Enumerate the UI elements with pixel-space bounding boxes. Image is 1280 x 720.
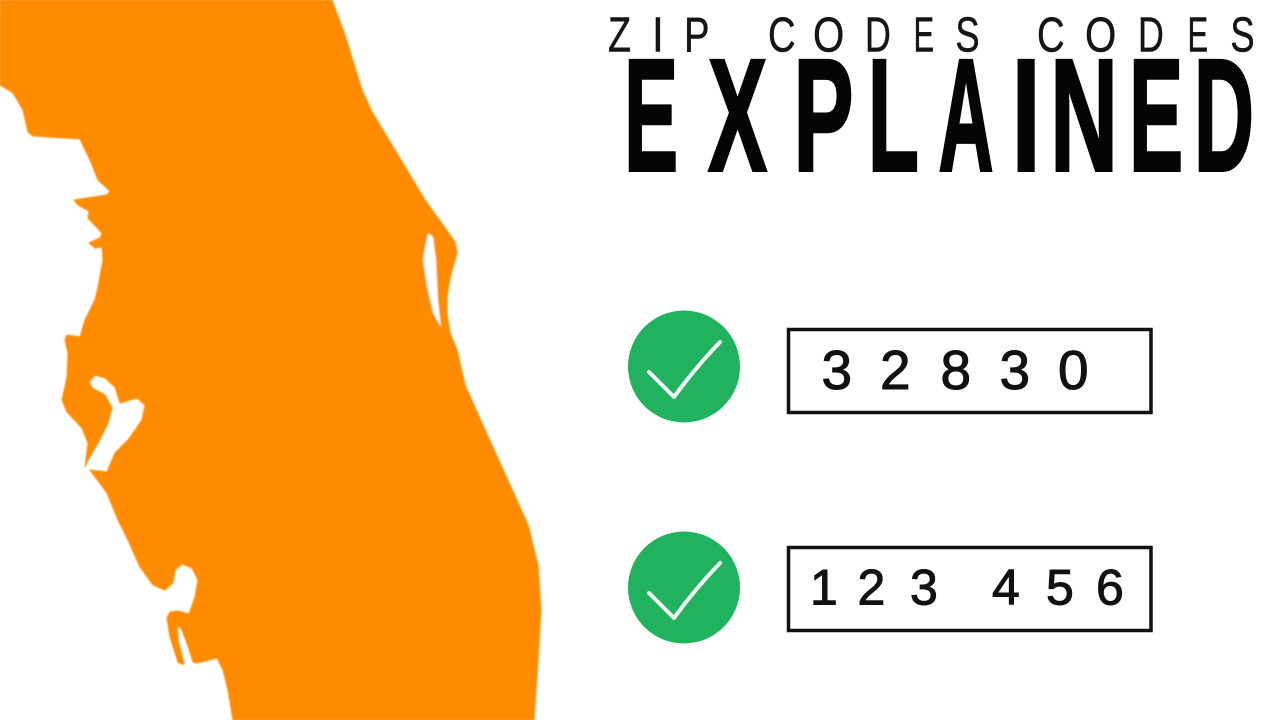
title: top line: C [768, 8, 796, 63]
title: main heading: E [1129, 25, 1183, 205]
title: top line: C [1037, 8, 1065, 63]
zip box 2 [788, 548, 1151, 630]
title: main heading: I [1012, 25, 1041, 205]
title: main heading: L [868, 26, 919, 206]
title: main heading: D [1194, 27, 1254, 206]
title: top line: O [1085, 8, 1116, 62]
icon: green check 1 [628, 310, 740, 422]
title: top line: D [865, 8, 891, 63]
icon: green check 2 [628, 532, 740, 644]
title: top line: S [955, 8, 980, 63]
zip box 1 [788, 330, 1151, 412]
title: main heading: A [938, 26, 994, 205]
title: top line: D [1138, 8, 1164, 63]
zip box 2: 123456 [810, 560, 1124, 616]
title: top line: O [813, 8, 844, 62]
title: top line: E [1188, 7, 1208, 62]
title: top line: P [684, 8, 709, 63]
title: top line: S [1230, 8, 1255, 63]
title: main heading [624, 25, 1254, 206]
title: main heading: E [624, 25, 678, 205]
title: main heading: N [1050, 25, 1118, 205]
title: top line [608, 7, 1255, 63]
title: main heading: X [708, 27, 767, 205]
title: top line: Z [608, 8, 631, 63]
zip box 1: 32830 [822, 339, 1089, 401]
title: top line: I [652, 7, 664, 62]
map: Florida silhouette [0, 0, 541, 720]
title: main heading: P [794, 26, 853, 205]
inlet: east coast lagoon [423, 233, 441, 327]
title: top line: E [914, 7, 934, 62]
